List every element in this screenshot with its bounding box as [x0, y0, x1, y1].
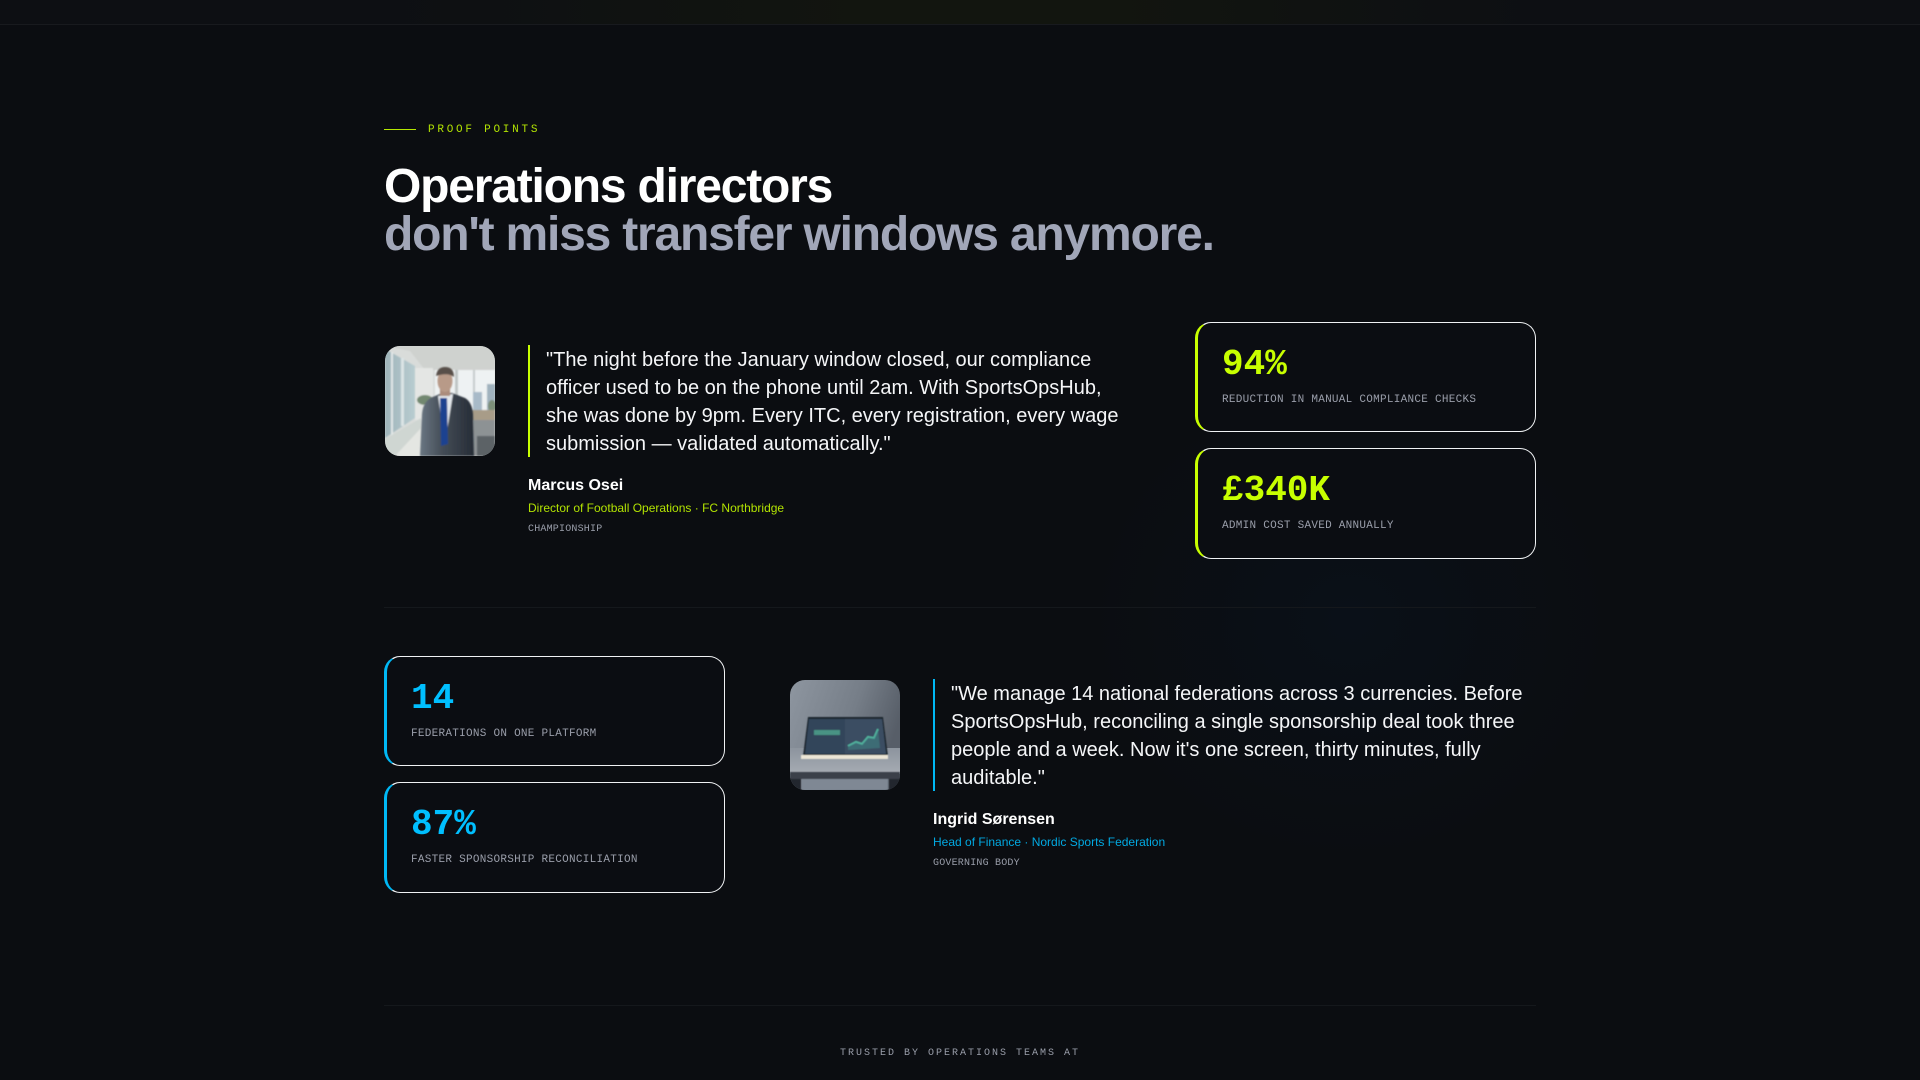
stat card: 14: FEDERATIONS ON ONE PLATFORM [411, 728, 597, 740]
quote: Marcus: "The night before the January window closed, our compliance [546, 349, 1091, 371]
stat card: 87%: FASTER SPONSORSHIP RECONCILIATION [411, 854, 638, 866]
stat card: 14 [384, 656, 725, 766]
stat card: 94%: REDUCTION IN MANUAL COMPLIANCE CHECKS [1222, 394, 1476, 406]
quote: Ingrid [951, 683, 1522, 789]
name: Ingrid Sørensen: Ingrid Sørensen [933, 811, 1055, 828]
quote: Marcus: she was done by 9pm. Every ITC, every registration, every wage [546, 405, 1118, 427]
photo: dashboard device [790, 680, 900, 790]
stat card: 14: 14 [411, 678, 454, 719]
name: Marcus Osei: Marcus Osei [528, 477, 623, 494]
quote: Ingrid: "We manage 14 national federations across 3 currencies. Before [951, 683, 1522, 705]
stat card: 87% [384, 782, 725, 893]
top navigation strip [0, 0, 1920, 25]
tag: Governing body: GOVERNING BODY [933, 858, 1020, 869]
quote: Ingrid: SportsOpsHub, reconciling a single sponsorship deal took three [951, 711, 1515, 733]
role: Ingrid Sørensen: Head of Finance · Nordic Sports Federation [933, 835, 1165, 849]
stat card: 94%: 94% [1222, 344, 1287, 385]
title: Operations directors [384, 160, 832, 213]
tag: Championship: CHAMPIONSHIP [528, 524, 602, 535]
role: Marcus Osei: Director of Football Operations · FC Northbridge [528, 501, 784, 515]
stat card: £340K: £340K [1222, 470, 1330, 511]
quote: Marcus [546, 349, 1118, 455]
eyebrow line [384, 129, 416, 130]
quote: Ingrid: auditable." [951, 767, 1045, 789]
footer label: TRUSTED BY OPERATIONS TEAMS AT [840, 1048, 1080, 1059]
stat card: £340K [1195, 448, 1536, 559]
stat card: 94% [1195, 322, 1536, 432]
title [384, 160, 1214, 261]
quote: Marcus: submission — validated automatically." [546, 433, 891, 455]
stat card: 87%: 87% [411, 804, 476, 845]
quote bar: Ingrid [933, 679, 935, 791]
quote: Ingrid: people and a week. Now it's one screen, thirty minutes, fully [951, 739, 1481, 761]
eyebrow: PROOF POINTS [428, 124, 540, 136]
photo: Marcus Osei [385, 346, 495, 456]
title: don't miss transfer windows anymore. [384, 208, 1214, 261]
quote bar: Marcus [528, 345, 530, 457]
quote: Marcus: officer used to be on the phone until 2am. With SportsOpsHub, [546, 377, 1102, 399]
stat card: £340K: ADMIN COST SAVED ANNUALLY [1222, 520, 1394, 532]
